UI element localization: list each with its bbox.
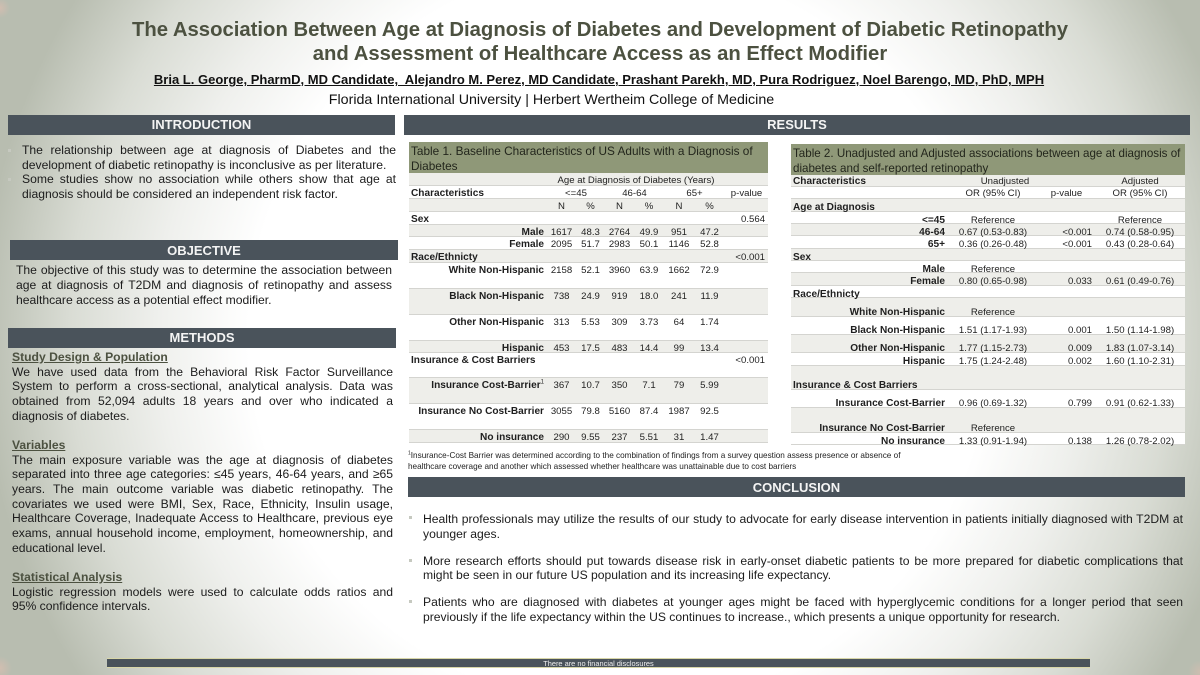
table 1: baseline characteristics: N <box>616 201 623 212</box>
table 1: baseline characteristics: 65+ <box>686 188 703 199</box>
heading: objective: OBJECTIVE <box>167 243 241 258</box>
table 1: baseline characteristics: 47.2 <box>700 227 719 238</box>
table 1: baseline characteristics: 52.8 <box>700 239 719 250</box>
table 1: baseline characteristics: 5160 <box>609 406 630 417</box>
table 2: unadjusted and adjusted associations <box>791 175 1185 445</box>
table 1: baseline characteristics: 3960 <box>609 265 630 276</box>
table 1: baseline characteristics: 11.9 <box>701 291 718 302</box>
authors: Bria L. George, PharmD, MD Candidate, Alejandro M. Perez, MD Candidate, Prashant Parekh, MD, Pura Rodriguez, Noel Barengo, MD, PhD, MPH <box>154 72 1044 87</box>
table 1: baseline characteristics: 50.1 <box>640 239 658 250</box>
table 2: unadjusted and adjusted associations: Black Non-Hispanic <box>850 325 945 336</box>
table 2: unadjusted and adjusted associations: Hispanic <box>903 356 945 367</box>
text block: conclusion bullet 1: Health professionals may utilize the results of our study to advocate for early disease intervention in patients initially diagnosed with T2DM at <box>423 512 1183 526</box>
table 2: unadjusted and adjusted associations: 0.67 (0.53-0.83) <box>959 227 1027 238</box>
table 2: unadjusted and adjusted associations: 0.033 <box>1068 276 1092 287</box>
table 2: unadjusted and adjusted associations: Reference <box>971 423 1015 434</box>
table 1: baseline characteristics: 350 <box>611 380 628 391</box>
heading: results: RESULTS <box>767 117 827 132</box>
table 1 title <box>409 142 768 173</box>
table 1: baseline characteristics: 5.51 <box>640 432 658 443</box>
table 2: unadjusted and adjusted associations: Sex <box>793 252 811 263</box>
table 2 title: Table 2. Unadjusted and Adjusted associations between age at diagnosis of <box>793 147 1180 160</box>
table 2: unadjusted and adjusted associations: 0.001 <box>1068 325 1092 336</box>
table 2: unadjusted and adjusted associations: Unadjusted <box>981 176 1029 187</box>
table 2: unadjusted and adjusted associations: 1.60 (1.10-2.31) <box>1106 356 1174 367</box>
table 1: baseline characteristics: 72.9 <box>700 265 719 276</box>
table 1: baseline characteristics <box>409 173 768 443</box>
table 1: baseline characteristics: 48.3 <box>581 227 600 238</box>
table footnote: healthcare coverage and another which assessed whether healthcare was unattainable due to cost barriers <box>408 462 796 471</box>
text block: conclusion bullet 2: might be seen in our future US population and its increasing life expectancy. <box>423 568 831 582</box>
table 2: unadjusted and adjusted associations: Reference <box>971 264 1015 275</box>
table 1: baseline characteristics: 51.7 <box>581 239 600 250</box>
text block: statistical analysis: Logistic regression models were used to calculate odds ratios and <box>12 585 393 599</box>
panel: introduction <box>8 115 396 201</box>
table 1: baseline characteristics: 1617 <box>551 227 572 238</box>
table 1 title: Diabetes <box>411 159 458 173</box>
panel: objective <box>10 240 398 307</box>
table 1: baseline characteristics: 309 <box>611 317 628 328</box>
text block: study design: obtained from 52,094 adults 18 years and over who indicated a <box>12 394 393 408</box>
table 2: unadjusted and adjusted associations: <0.001 <box>1062 227 1092 238</box>
table 2: unadjusted and adjusted associations: Adjusted <box>1121 176 1159 187</box>
table 2: unadjusted and adjusted associations: 0.799 <box>1068 398 1092 409</box>
table 1: baseline characteristics: N <box>676 201 682 212</box>
table 1: baseline characteristics: 313 <box>553 317 570 328</box>
table 2: unadjusted and adjusted associations: 1.26 (0.78-2.02) <box>1106 436 1174 447</box>
table 1: baseline characteristics: 64 <box>674 317 684 328</box>
text block: study design: System to perform a cross-sectional, analytical analysis. Data was <box>12 379 393 393</box>
text block: statistical analysis: Statistical Analysis <box>12 570 122 584</box>
table 1: baseline characteristics: % <box>586 201 595 212</box>
table 2: unadjusted and adjusted associations: 1.77 (1.15-2.73) <box>959 343 1027 354</box>
table 1: baseline characteristics: 14.4 <box>640 343 658 354</box>
table 1: baseline characteristics: 52.1 <box>581 265 600 276</box>
table 1: baseline characteristics: 919 <box>611 291 628 302</box>
table 1: baseline characteristics: 79 <box>674 380 684 391</box>
table 2: unadjusted and adjusted associations: 1.33 (0.91-1.94) <box>959 436 1027 447</box>
table 1: baseline characteristics: Male <box>522 227 544 238</box>
text block: conclusion bullet 2: More research efforts should put towards disease risk in early-onset diabetic patients to be more prepared for diabetic complications that <box>423 554 1183 568</box>
footer disclosure bar <box>107 659 1090 667</box>
table 2: unadjusted and adjusted associations: 0.36 (0.26-0.48) <box>959 239 1027 250</box>
table 1: baseline characteristics: Insurance No Cost-Barrier <box>418 406 544 417</box>
table 1: baseline characteristics: 2095 <box>551 239 572 250</box>
text block: introduction bullets: Some studies show no association while others show that age at <box>22 172 396 186</box>
table 1: baseline characteristics: 7.1 <box>642 380 656 391</box>
text block: conclusion bullet 3 <box>423 595 1183 624</box>
table 1: baseline characteristics: 1.74 <box>700 317 719 328</box>
table 2: unadjusted and adjusted associations: White Non-Hispanic <box>850 307 945 318</box>
text block: variables: Variables <box>12 438 65 452</box>
table 1: baseline characteristics: Characteristics <box>411 188 484 199</box>
table 1: baseline characteristics: Insurance Cost-Barrier1 <box>431 380 544 391</box>
table 2: unadjusted and adjusted associations: 0.91 (0.62-1.33) <box>1106 398 1174 409</box>
table 1: baseline characteristics: 49.9 <box>640 227 658 238</box>
table 1: baseline characteristics: 738 <box>553 291 570 302</box>
table 2 title <box>791 144 1185 175</box>
text block: variables: Healthcare Coverage, Inadequate Access to Healthcare, previous eye <box>12 511 393 525</box>
heading: conclusion: CONCLUSION <box>753 480 840 495</box>
table 1: baseline characteristics: Insurance & Cost Barriers <box>411 355 536 366</box>
table 2: unadjusted and adjusted associations: OR (95% CI) <box>1113 188 1167 199</box>
table 1: baseline characteristics: % <box>645 201 653 212</box>
text block: study design: We have used data from the Behavioral Risk Factor Surveillance <box>12 365 393 379</box>
table 1: baseline characteristics: 367 <box>553 380 570 391</box>
text block: objective: The objective of this study was to determine the association between <box>16 263 392 277</box>
table 2: unadjusted and adjusted associations: Other Non-Hispanic <box>850 343 945 354</box>
table 2: unadjusted and adjusted associations: 0.96 (0.69-1.32) <box>959 398 1027 409</box>
table 1: baseline characteristics: 31 <box>674 432 684 443</box>
table 1: baseline characteristics: 18.0 <box>640 291 658 302</box>
table 2: unadjusted and adjusted associations: Age at Diagnosis <box>793 202 875 213</box>
table 2: unadjusted and adjusted associations: <=45 <box>922 215 945 226</box>
table 1: baseline characteristics: 3055 <box>551 406 572 417</box>
title <box>132 19 1068 65</box>
table 1: baseline characteristics: 87.4 <box>640 406 658 417</box>
table 1: baseline characteristics: 2983 <box>609 239 630 250</box>
table 1: baseline characteristics: 5.53 <box>581 317 600 328</box>
table footnote: 1Insurance-Cost Barrier was determined according to the combination of findings from a survey question assess presence or absence of <box>408 450 900 460</box>
panel: conclusion <box>408 477 1185 624</box>
affiliation: Florida International University | Herbert Wertheim College of Medicine <box>329 92 774 108</box>
table 2: unadjusted and adjusted associations: Reference <box>971 307 1015 318</box>
table 1: baseline characteristics: 17.5 <box>581 343 600 354</box>
table 2: unadjusted and adjusted associations: Female <box>910 276 945 287</box>
table 2: unadjusted and adjusted associations: Insurance & Cost Barriers <box>793 380 918 391</box>
table 1: baseline characteristics: 237 <box>611 432 628 443</box>
table 2: unadjusted and adjusted associations: Reference <box>1118 215 1162 226</box>
table 2: unadjusted and adjusted associations: 1.50 (1.14-1.98) <box>1106 325 1174 336</box>
table 1: baseline characteristics: 1987 <box>668 406 690 417</box>
text block: variables: educational level. <box>12 541 106 555</box>
table 1: baseline characteristics: N <box>558 201 565 212</box>
table 1: baseline characteristics: 0.564 <box>741 214 765 225</box>
text block: conclusion bullet 3: previously if the life expectancy within the US continues to increase., which presents a unique opportunity for research. <box>423 610 1060 624</box>
title: and Assessment of Healthcare Access as an Effect Modifier <box>313 43 887 65</box>
heading: methods <box>8 328 396 348</box>
table footnote <box>408 450 901 471</box>
table 2: unadjusted and adjusted associations: <0.001 <box>1062 239 1092 250</box>
title: The Association Between Age at Diagnosis of Diabetes and Development of Diabetic Retinopathy <box>132 19 1068 41</box>
table 1: baseline characteristics: 10.7 <box>581 380 600 391</box>
text block: objective: age at diagnosis of T2DM and diagnosis of retinopathy and assess <box>16 278 392 292</box>
table 2: unadjusted and adjusted associations: Characteristics <box>793 176 866 187</box>
table 1: baseline characteristics: Hispanic <box>502 343 544 354</box>
table 1: baseline characteristics: 1146 <box>669 239 689 250</box>
footer disclosure bar: There are no financial disclosures <box>543 659 654 668</box>
table 2: unadjusted and adjusted associations: Reference <box>971 215 1015 226</box>
table 2: unadjusted and adjusted associations: 0.009 <box>1068 343 1092 354</box>
panel: methods <box>8 328 396 613</box>
text block: variables <box>12 438 393 555</box>
text block: introduction bullets <box>22 143 396 201</box>
heading: conclusion <box>408 477 1185 497</box>
table 2: unadjusted and adjusted associations: 46-64 <box>919 227 945 238</box>
table 2: unadjusted and adjusted associations: 1.83 (1.07-3.14) <box>1106 343 1174 354</box>
heading: introduction <box>8 115 395 135</box>
table 2: unadjusted and adjusted associations: Male <box>923 264 945 275</box>
text block: variables: years. The main outcome variable was diabetic retinopathy. The <box>12 482 393 496</box>
table 1: baseline characteristics: 1662 <box>668 265 690 276</box>
heading: results <box>404 115 1190 135</box>
table 2: unadjusted and adjusted associations: 1.75 (1.24-2.48) <box>959 356 1027 367</box>
table 1: baseline characteristics: No insurance <box>480 432 544 443</box>
text block: introduction bullets: The relationship between age at diagnosis of Diabetes and the <box>22 143 396 157</box>
text block: objective: healthcare access as a potential effect modifier. <box>16 293 272 307</box>
table 1: baseline characteristics: Age at Diagnosis of Diabetes (Years) <box>558 175 714 186</box>
text block: variables: exams, annual household income, employment, homeownership, and <box>12 526 393 540</box>
table 1: baseline characteristics: 483 <box>611 343 628 354</box>
table 1: baseline characteristics: Sex <box>411 214 429 225</box>
text block: variables: separated into three age categories: ≤45 years, 46-64 years, and ≥65 <box>12 467 393 481</box>
table 2: unadjusted and adjusted associations: 65+ <box>928 239 945 250</box>
table 1: baseline characteristics: p-value <box>731 188 762 199</box>
text block: study design: Study Design & Population <box>12 350 168 364</box>
table 1: baseline characteristics: 2158 <box>551 265 572 276</box>
table 1: baseline characteristics: 24.9 <box>581 291 600 302</box>
heading: introduction: INTRODUCTION <box>152 117 251 132</box>
text block: conclusion bullet 3: Patients who are diagnosed with diabetes at younger ages might be faced with hyperglycemic conditions for a longer period that seen <box>423 595 1183 609</box>
table 1: baseline characteristics: Black Non-Hispanic <box>449 291 544 302</box>
text block: introduction bullets: development of diabetic retinopathy is inconclusive as per literature. <box>22 158 386 172</box>
table 1: baseline characteristics: 3.73 <box>640 317 658 328</box>
table 1: baseline characteristics: <=45 <box>565 188 587 199</box>
text block: variables: The main exposure variable was the age at diagnosis of diabetes <box>12 453 393 467</box>
table 2: unadjusted and adjusted associations: 0.138 <box>1068 436 1092 447</box>
table 1: baseline characteristics: 5.99 <box>700 380 719 391</box>
table 1: baseline characteristics: Other Non-Hispanic <box>449 317 544 328</box>
table 2: unadjusted and adjusted associations: OR (95% CI) <box>966 188 1020 199</box>
table 1: baseline characteristics: 92.5 <box>700 406 719 417</box>
text block: conclusion bullet 1 <box>423 512 1183 541</box>
table 1: baseline characteristics: 453 <box>553 343 570 354</box>
table 1: baseline characteristics: 46-64 <box>622 188 647 199</box>
table 2: unadjusted and adjusted associations: 0.74 (0.58-0.95) <box>1106 227 1174 238</box>
table 1: baseline characteristics: Female <box>509 239 544 250</box>
table 2: unadjusted and adjusted associations: p-value <box>1051 188 1082 199</box>
table 1: baseline characteristics: 13.4 <box>700 343 719 354</box>
table 2: unadjusted and adjusted associations: Insurance Cost-Barrier <box>836 398 945 409</box>
table 2: unadjusted and adjusted associations: 0.61 (0.49-0.76) <box>1106 276 1174 287</box>
table 1: baseline characteristics: 241 <box>671 291 687 302</box>
text block: conclusion bullet 1: younger ages. <box>423 527 500 541</box>
table 1: baseline characteristics: <0.001 <box>735 355 765 366</box>
text block: study design <box>12 350 393 423</box>
table 2: unadjusted and adjusted associations: No insurance <box>881 436 945 447</box>
table 2 title: diabetes and self-reported retinopathy <box>793 162 988 175</box>
table 1: baseline characteristics: 1.47 <box>700 432 719 443</box>
text block: statistical analysis: 95% confidence intervals. <box>12 599 150 613</box>
table 1: baseline characteristics: 9.55 <box>581 432 600 443</box>
text block: variables: covariates we used were BMI, Sex, Race, Ethnicity, Insulin usage, <box>12 497 393 511</box>
table 2: unadjusted and adjusted associations: 1.51 (1.17-1.93) <box>959 325 1027 336</box>
text block: conclusion bullet 2 <box>423 554 1183 582</box>
table 2: unadjusted and adjusted associations: 0.002 <box>1068 356 1092 367</box>
table 1: baseline characteristics: 99 <box>674 343 684 354</box>
table 2: unadjusted and adjusted associations: 0.43 (0.28-0.64) <box>1106 239 1174 250</box>
table 1: baseline characteristics: 2764 <box>609 227 630 238</box>
heading: objective <box>10 240 398 260</box>
table 1: baseline characteristics: 951 <box>671 227 687 238</box>
table 1: baseline characteristics: 63.9 <box>640 265 658 276</box>
table 1: baseline characteristics: <0.001 <box>735 252 765 263</box>
heading: methods: METHODS <box>170 330 234 345</box>
text block: objective <box>16 263 392 307</box>
text block: statistical analysis <box>12 570 393 613</box>
table 2: unadjusted and adjusted associations: Race/Ethnicty <box>793 289 860 300</box>
table 1 title: Table 1. Baseline Characteristics of US Adults with a Diagnosis of <box>411 144 753 158</box>
table 2: unadjusted and adjusted associations: 0.80 (0.65-0.98) <box>959 276 1027 287</box>
table 1: baseline characteristics: % <box>705 201 714 212</box>
text block: introduction bullets: diagnosis should be considered an independent risk factor. <box>22 187 338 201</box>
table 1: baseline characteristics: 79.8 <box>581 406 600 417</box>
table 1: baseline characteristics: Race/Ethnicty <box>411 252 478 263</box>
text block: study design: diagnosis of diabetes. <box>12 409 129 423</box>
table 1: baseline characteristics: 290 <box>553 432 570 443</box>
table 2: unadjusted and adjusted associations: Insurance No Cost-Barrier <box>819 423 945 434</box>
table 1: baseline characteristics: White Non-Hispanic <box>449 265 544 276</box>
